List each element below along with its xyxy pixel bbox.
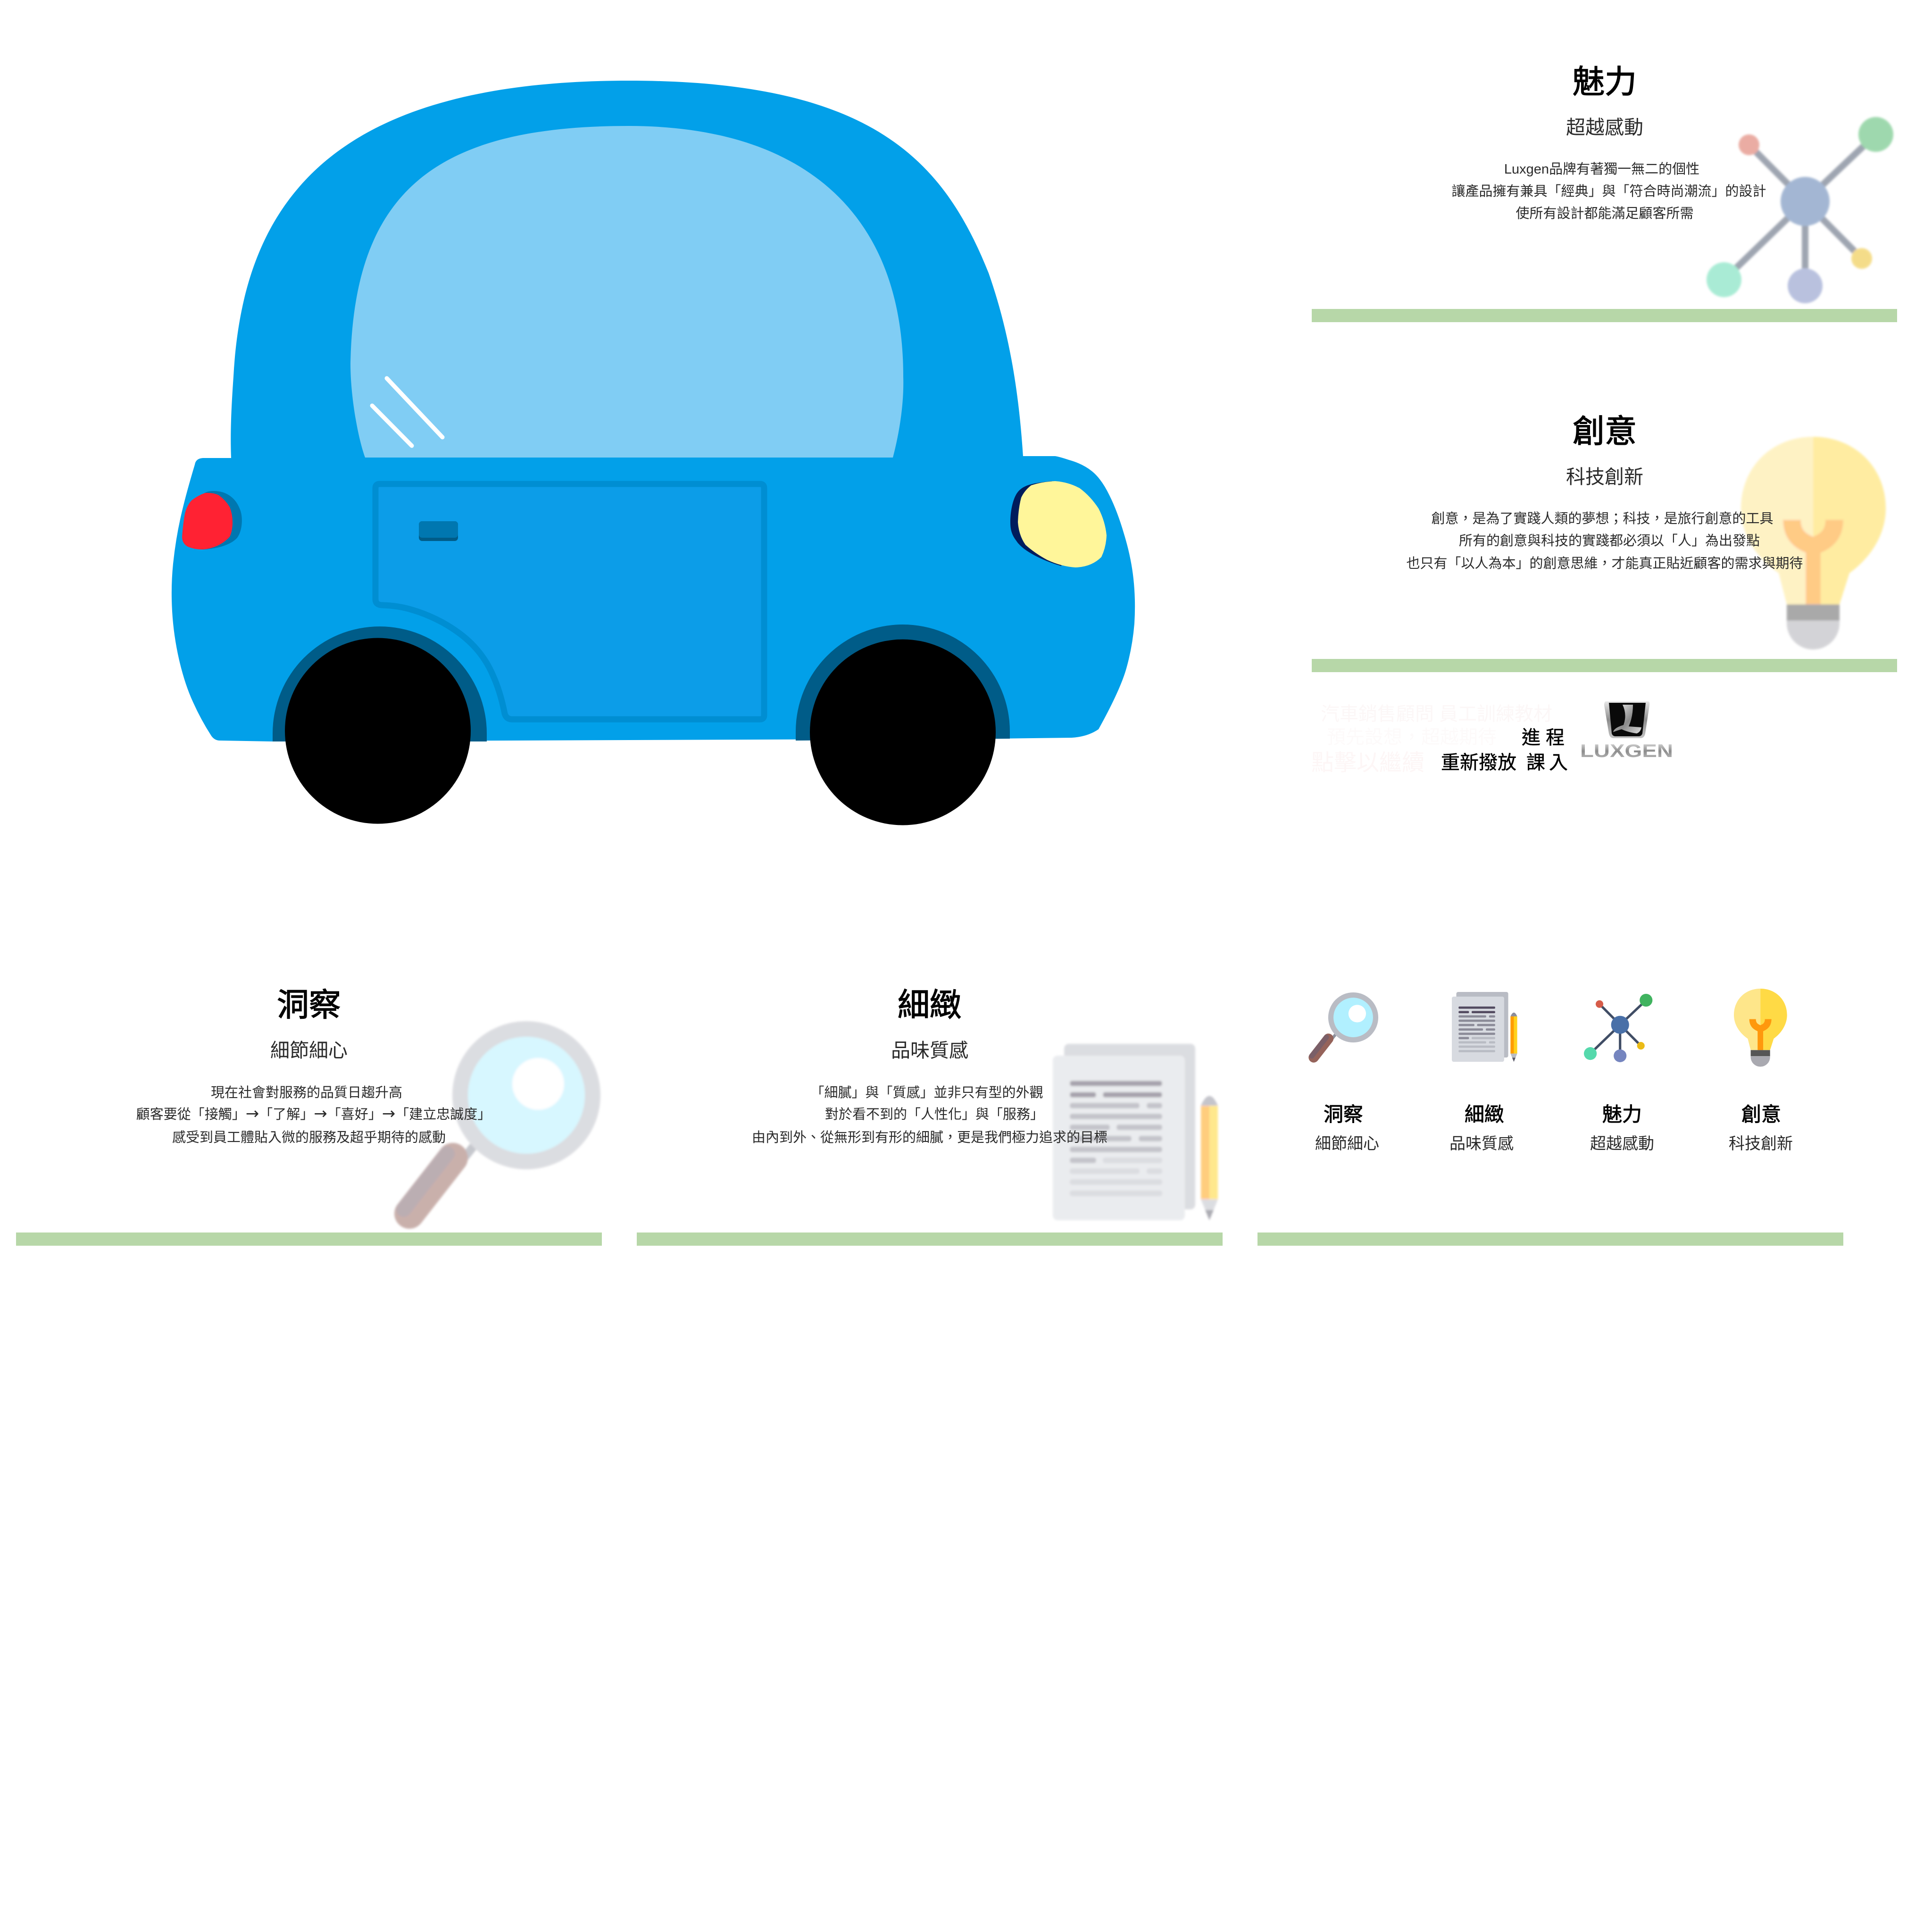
item: insight (1312, 992, 1379, 1153)
green bar (1257, 1232, 1843, 1246)
description: creativity: 創意，是為了實踐人類的夢想；科技，是旅行創意的工具 (1431, 511, 1774, 526)
item: insight: 洞察 (1324, 1103, 1363, 1125)
car cabin (231, 81, 1023, 460)
item: creativity: 科技創新 (1729, 1135, 1793, 1153)
faint background text: 點擊以繼續 (1311, 750, 1424, 775)
front wheel (796, 625, 1010, 825)
heading: charm: 魅力 (1573, 64, 1637, 100)
logo: Luxgen (1580, 701, 1673, 761)
car window (350, 126, 903, 458)
car lower body (172, 456, 1135, 741)
panel: creativity (1312, 414, 1897, 672)
description: creativity: 所有的創意與科技的實踐都必須以「人」為出發點 (1459, 533, 1760, 549)
item: creativity: 創意 (1741, 1103, 1781, 1125)
subheading: insight: 細節細心 (270, 1040, 348, 1061)
replay and enter labels (1441, 752, 1568, 773)
subheading: refinement: 品味質感 (891, 1040, 968, 1061)
faint background text: 汽車銷售顧問 員工訓練教材 (1321, 704, 1552, 724)
item: refinement (1449, 992, 1517, 1153)
panel: refinement (637, 987, 1223, 1246)
description: insight: 顧客要從「接觸」→「了解」→「喜好」→「建立忠誠度」 (136, 1104, 491, 1123)
car door (375, 484, 764, 719)
head light (1010, 481, 1107, 567)
green bar (637, 1232, 1223, 1246)
item: charm (1584, 994, 1654, 1153)
item: charm: 超越感動 (1590, 1135, 1654, 1153)
description: insight (136, 1085, 491, 1145)
progress label: 進 程 (1522, 727, 1565, 748)
icon: magnifier (404, 1021, 600, 1214)
description: charm: 讓產品擁有兼具「經典」與「符合時尚潮流」的設計 (1451, 183, 1766, 199)
panel: four values overview (1257, 989, 1843, 1246)
replay and enter labels: 重新撥放 (1441, 752, 1516, 773)
tail light (182, 491, 242, 550)
replay and enter labels: 入 (1549, 752, 1568, 773)
panel: charm (1312, 64, 1897, 322)
panel: course progress and logo (1311, 701, 1673, 775)
heading: refinement: 細緻 (898, 987, 962, 1023)
description: refinement: 對於看不到的「人性化」與「服務」 (825, 1107, 1044, 1122)
item: refinement: 細緻 (1465, 1103, 1504, 1125)
panel: insight (16, 987, 602, 1246)
window reflection lines (372, 378, 442, 446)
description: refinement: 由內到外、從無形到有形的細膩，更是我們極力追求的目標 (752, 1130, 1108, 1145)
subheading: charm: 超越感動 (1566, 117, 1643, 138)
item: insight: 細節細心 (1315, 1135, 1379, 1153)
description: insight: 現在社會對服務的品質日趨升高 (211, 1085, 402, 1100)
description: creativity (1406, 511, 1803, 571)
heading: creativity: 創意 (1573, 414, 1637, 450)
faint background text (1311, 704, 1552, 775)
door handle (419, 521, 458, 541)
green bar (16, 1232, 602, 1246)
faint background text: 預先設想，超越期待 (1327, 727, 1497, 748)
description: refinement (752, 1085, 1108, 1145)
replay and enter labels: 課 (1526, 752, 1545, 773)
green bar (1312, 309, 1897, 322)
logo: Luxgen: LUXGEN (1580, 741, 1673, 761)
icon: light bulb (1741, 437, 1886, 650)
item: refinement: 品味質感 (1449, 1135, 1514, 1153)
description: charm: 使所有設計都能滿足顧客所需 (1516, 206, 1694, 221)
item: charm: 魅力 (1602, 1103, 1642, 1125)
description: charm: Luxgen品牌有著獨一無二的個性 (1504, 161, 1699, 177)
description: insight: 感受到員工體貼入微的服務及超乎期待的感動 (172, 1130, 446, 1145)
heading: insight: 洞察 (277, 987, 341, 1023)
icon: network (1707, 117, 1893, 303)
green bar (1312, 659, 1897, 672)
item: creativity (1729, 989, 1793, 1153)
rear wheel (273, 626, 487, 824)
description: refinement: 「細膩」與「質感」並非只有型的外觀 (810, 1085, 1043, 1100)
description: creativity: 也只有「以人為本」的創意思維，才能真正貼近顧客的需求與期待 (1406, 556, 1803, 571)
illustration: blue car (172, 81, 1135, 825)
subheading: creativity: 科技創新 (1566, 466, 1643, 488)
description: charm (1451, 161, 1766, 221)
icon: document and pencil (1053, 1044, 1218, 1220)
